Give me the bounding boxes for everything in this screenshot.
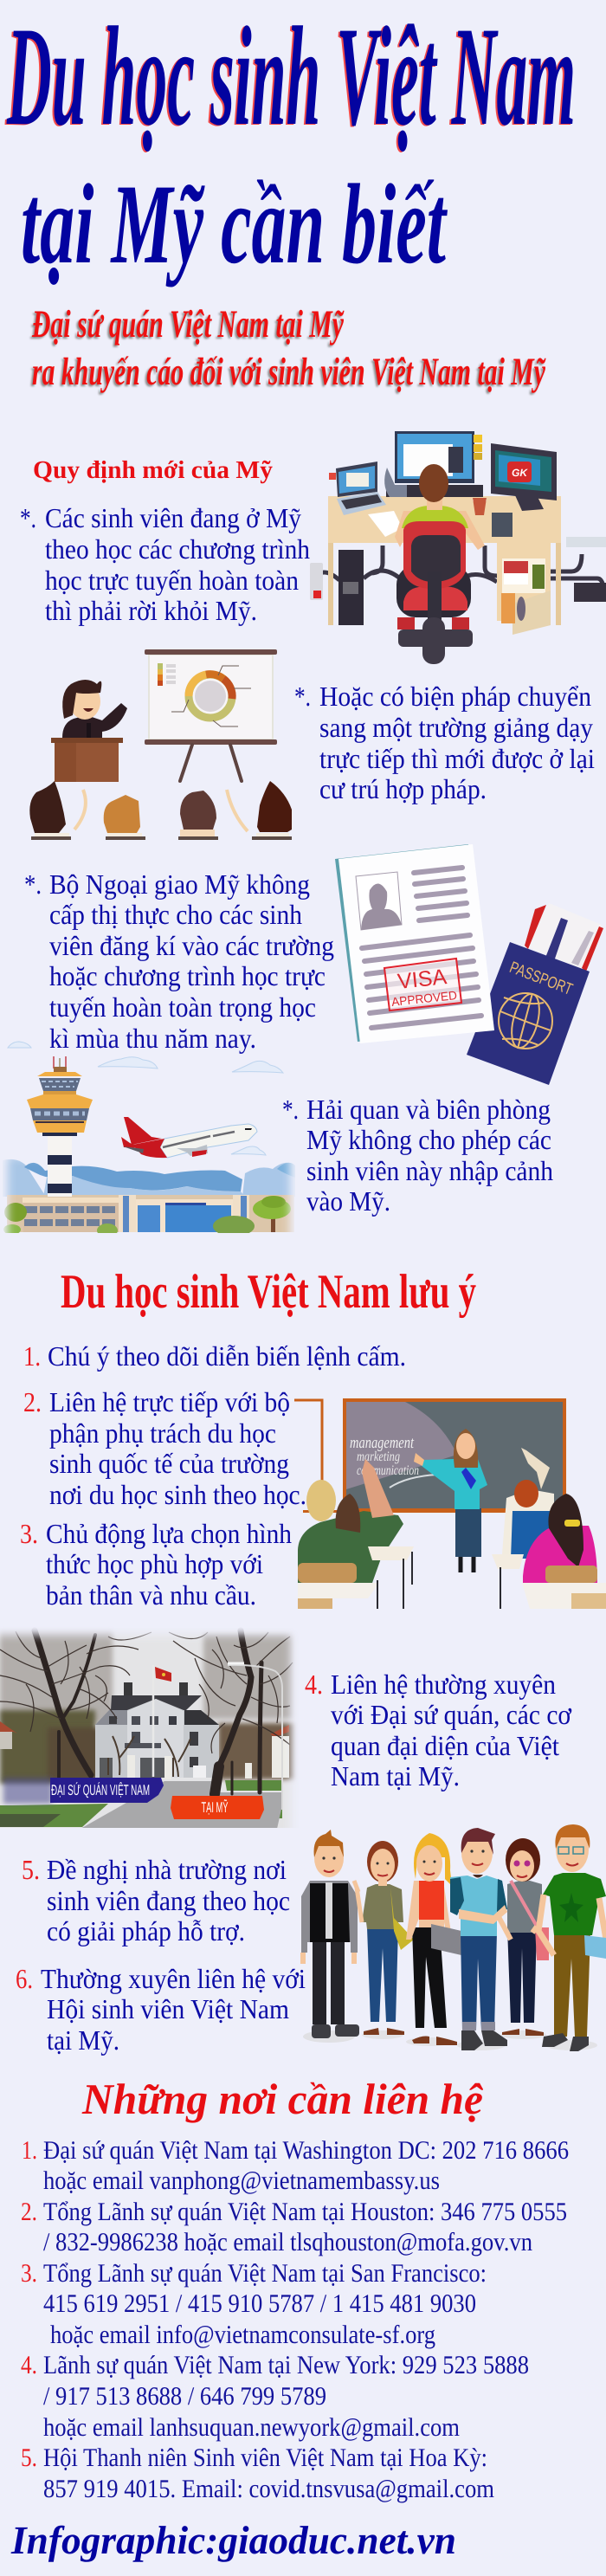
student 1 (301, 1830, 359, 2043)
passport: PASSPORT (507, 959, 575, 999)
list item 4: với Đại sứ quán, các cơ (331, 1699, 572, 1730)
contact 2 (21, 2198, 567, 2256)
chalkboard: management (350, 1434, 415, 1452)
passport (467, 942, 590, 1085)
list item 5: có giải pháp hỗ trợ. (47, 1915, 245, 1947)
contact 4: / 917 513 8688 / 646 799 5789 (43, 2382, 326, 2411)
list item 2 (23, 1386, 306, 1510)
text block: rule 4: Mỹ không cho phép các (306, 1124, 551, 1155)
heading: places to contact: Những nơi cần liên hệ (81, 2075, 484, 2123)
text block: rule 4: *. (282, 1094, 299, 1125)
road and lawns (0, 1804, 108, 1827)
list item 6: Hội sinh viên Việt Nam (47, 1993, 289, 2024)
control tower (27, 1056, 93, 1197)
right monitor (491, 443, 557, 511)
visa approved stamp: APPROVED (390, 988, 458, 1009)
list item 2: sinh quốc tế của trường (49, 1448, 289, 1479)
airplane (121, 1117, 257, 1158)
chalkboard (294, 1398, 566, 1513)
chalkboard: communication (357, 1463, 419, 1478)
text block: rule 3: cấp thị thực cho các sinh (49, 899, 302, 930)
subtitle: Đại sứ quán Việt Nam tại Mỹ (31, 302, 345, 345)
text block: rule 2: cư trú hợp pháp. (319, 773, 487, 804)
text block: rule 3: viên đăng kí vào các trường (49, 930, 334, 961)
red banner (171, 1796, 264, 1819)
list item 3: Chủ động lựa chọn hình (46, 1518, 292, 1549)
contact 5: 5. (21, 2444, 37, 2472)
contact 3: Tổng Lãnh sự quán Việt Nam tại San Francisco: (43, 2259, 487, 2288)
list item 4: Nam tại Mỹ. (331, 1760, 460, 1792)
list item 4: 4. (305, 1669, 323, 1700)
student 6 (538, 1824, 606, 2051)
building (95, 1699, 219, 1778)
heading: new US rules: Quy định mới của Mỹ (33, 456, 273, 484)
list item 5 (22, 1854, 290, 1947)
text block: rule 3: Bộ Ngoại giao Mỹ không (49, 868, 310, 900)
contact 1: hoặc email vanphong@vietnamembassy.us (43, 2166, 440, 2195)
flag (155, 1667, 171, 1682)
list item 6: Thường xuyên liên hệ với (41, 1963, 306, 1994)
visa approved stamp (384, 959, 461, 1010)
blue banner: ĐẠI SỨ QUÁN VIỆT NAM (51, 1782, 150, 1798)
text block: rule 3: hoặc chương trình học trực (49, 960, 326, 991)
title (6, 0, 576, 287)
subtitle (31, 302, 546, 393)
contact 5 (21, 2444, 494, 2503)
text block: rule 4: Hải quan và biên phòng (306, 1094, 551, 1125)
illustration: group of six students (301, 1824, 606, 2051)
office chair (396, 521, 473, 664)
contact 4: hoặc email lanhsuquan.newyork@gmail.com (43, 2413, 460, 2442)
list item 2: 2. (23, 1386, 42, 1417)
sky and terminal building (3, 1159, 295, 1237)
list item 3: 3. (20, 1518, 38, 1549)
right monitor: GK (512, 467, 528, 479)
icon: classroom with teacher and students (294, 1398, 606, 1609)
text block: rule 3 (24, 868, 334, 1054)
list item 1: Chú ý theo dõi diễn biến lệnh cấm. (48, 1340, 406, 1372)
text block: rule 1: *. (20, 502, 36, 533)
contact 5: Hội Thanh niên Sinh viên Việt Nam tại Hoa Kỳ: (43, 2444, 487, 2472)
text block: rule 2 (294, 681, 595, 804)
contact 3: 3. (21, 2259, 37, 2288)
student 2 (354, 1841, 414, 2039)
red banner: TẠI MỸ (201, 1799, 229, 1816)
small clouds (8, 1042, 283, 1155)
contact 3: hoặc email info@vietnamconsulate-sf.org (50, 2321, 435, 2349)
audience heads (29, 781, 292, 840)
text block: rule 3: kì mùa thu năm nay. (49, 1023, 256, 1054)
small trees in front of the building (108, 1736, 190, 1777)
list item 5: 5. (22, 1854, 40, 1885)
projector screen with donut chart (145, 649, 277, 781)
contact 4: Lãnh sự quán Việt Nam tại New York: 929 523 5888 (43, 2351, 529, 2379)
text block: rule 1: thì phải rời khỏi Mỹ. (45, 595, 257, 626)
list item 2: nơi du học sinh theo học. (49, 1479, 306, 1510)
list item 3: thức học phù hợp với (46, 1548, 263, 1579)
blue banner (3, 1778, 164, 1804)
list item 4: Liên hệ thường xuyên (331, 1669, 556, 1700)
text block: rule 1: theo học các chương trình (45, 533, 310, 565)
text block: rule 4: sinh viên này nhập cảnh (306, 1155, 553, 1186)
list item 6: tại Mỹ. (47, 2024, 119, 2056)
person with hair and green shirt (395, 464, 485, 550)
list item 3: bản thân và nhu cầu. (46, 1579, 256, 1611)
laptop (329, 462, 386, 515)
student 3 (406, 1833, 461, 2046)
contact 2: 2. (21, 2198, 37, 2226)
list item 5: sinh viên đang theo học (47, 1885, 290, 1916)
contact 2: / 832-9986238 hoặc email tlsqhouston@mofa.gov.vn (43, 2228, 532, 2256)
contact 3 (21, 2259, 487, 2349)
seated students (298, 1448, 597, 1583)
visa document (335, 844, 494, 1043)
text block: rule 3: tuyến hoàn toàn trọng học (49, 991, 316, 1023)
contact 3: 415 619 2951 / 415 910 5787 / 1 415 481 9030 (43, 2289, 476, 2318)
icon: student at computer desk (310, 431, 606, 664)
street lamp (228, 1665, 282, 1810)
center monitor (384, 431, 483, 497)
icon: presenter and projector screen (29, 649, 292, 840)
text block: rule 1: học trực tuyến hoàn toàn (45, 565, 299, 596)
text block: rule 4 (282, 1094, 553, 1217)
chalkboard: marketing (357, 1449, 400, 1464)
contact 1: 1. (22, 2136, 37, 2165)
bare tree branches (35, 1630, 261, 1794)
text block: rule 2: Hoặc có biện pháp chuyển (319, 681, 591, 712)
list item 6 (16, 1963, 306, 2056)
teacher (414, 1429, 487, 1572)
list item 2: Liên hệ trực tiếp với bộ (49, 1386, 290, 1417)
visa approved stamp: VISA (396, 965, 448, 994)
list item 1: 1. (23, 1340, 41, 1372)
footer credit: Infographic:giaoduc.net.vn (10, 2518, 456, 2562)
photo: Vietnamese embassy in the USA (0, 1628, 299, 1829)
student 4 (450, 1828, 507, 2050)
student 5 (497, 1838, 549, 2039)
text block: rule 1: Các sinh viên đang ở Mỹ (45, 502, 301, 533)
contact 5: 857 919 4015. Email: covid.tnsvusa@gmail.com (43, 2475, 494, 2503)
contact 1 (22, 2136, 569, 2195)
presenter (51, 680, 127, 782)
contact 4: 4. (21, 2351, 37, 2379)
list item 5: Đề nghị nhà trường nơi (47, 1854, 287, 1885)
ticket behind passport (525, 903, 603, 972)
text block: rule 2: *. (294, 681, 311, 712)
list item 2: phận phụ trách du học (49, 1417, 276, 1449)
contact 4 (21, 2351, 529, 2442)
icon: airport with control tower and plane (3, 1042, 295, 1237)
icon: visa document and passport (335, 844, 603, 1085)
list item 6: 6. (16, 1963, 33, 1994)
list item 4: quan đại diện của Việt (331, 1730, 559, 1761)
classroom desks (298, 1546, 606, 1609)
list item 4 (305, 1669, 572, 1792)
list item 3 (20, 1518, 292, 1611)
text block: rule 4: vào Mỹ. (306, 1185, 390, 1217)
sticky notes (474, 435, 482, 460)
text block: rule 1 (20, 502, 310, 626)
text block: rule 3: *. (24, 868, 42, 900)
